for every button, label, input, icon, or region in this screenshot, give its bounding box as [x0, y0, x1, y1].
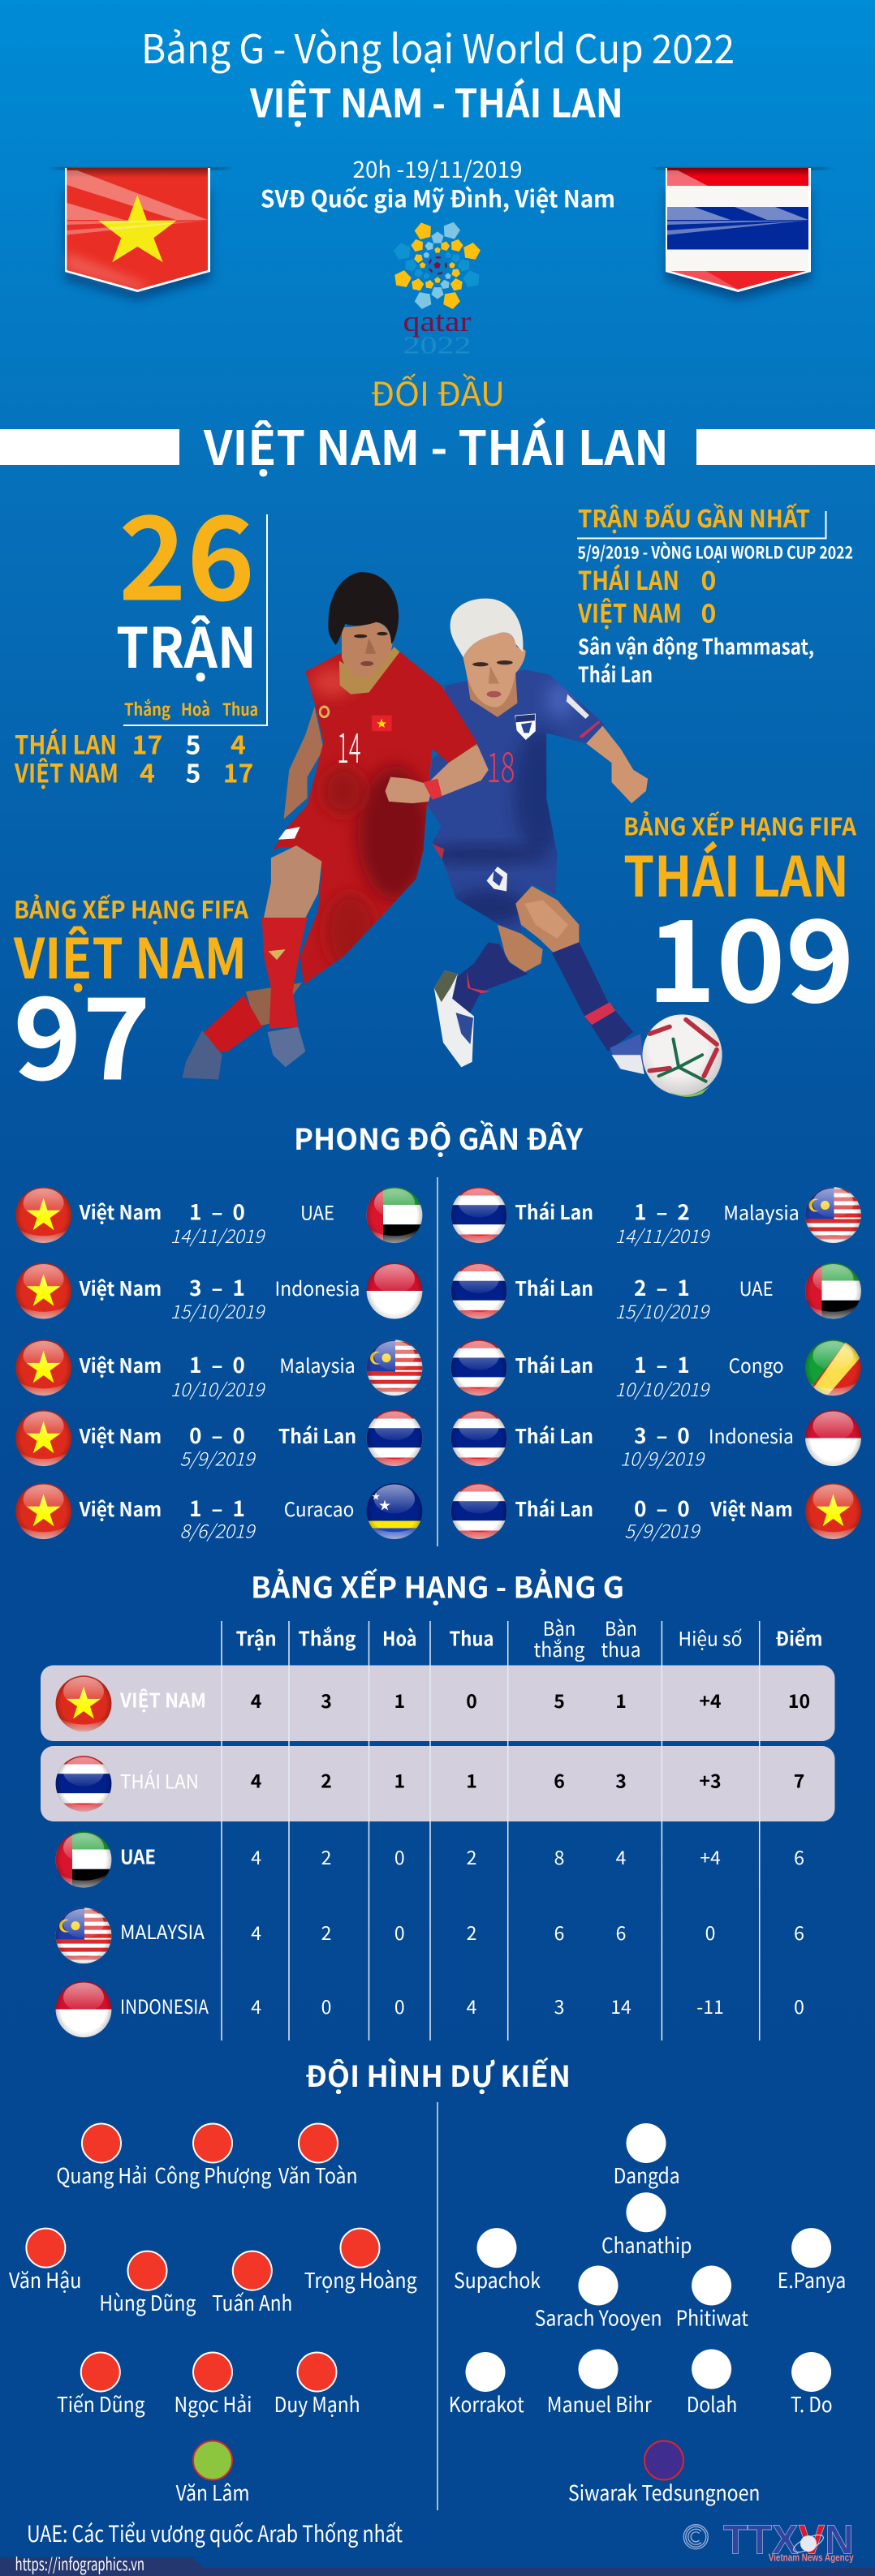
FIFA ranking: Thailand: [623, 806, 857, 1035]
match: TH - Congo: [450, 1340, 865, 1402]
row: Thái Lan: THÁI LAN: [15, 725, 117, 763]
title: match: VIỆT NAM - THÁI LAN: [249, 71, 623, 128]
goalkeeper marker: [193, 2441, 232, 2479]
row: Thái Lan: +3: [699, 1766, 722, 1794]
score: Thái Lan: 0: [701, 561, 716, 598]
row: Indonesia: [55, 1981, 804, 2038]
front leg: [515, 886, 579, 953]
back leg: [246, 983, 302, 1026]
row: Việt Nam: VIỆT NAM: [14, 753, 119, 790]
match: TH - UAE: 15/10/2019: [615, 1297, 711, 1324]
match: VN - Indonesia: Việt Nam: [79, 1273, 162, 1301]
player names: E.Panya: [778, 2264, 846, 2294]
player names: Dangda: [614, 2160, 680, 2190]
row: Malaysia: 6: [554, 1918, 564, 1946]
match: VN - Indonesia: 3 – 1: [189, 1272, 245, 1302]
score: Việt Nam: 0: [701, 594, 716, 631]
row: UAE: 2: [467, 1843, 476, 1870]
row: Thái Lan: 4: [251, 1766, 261, 1794]
match: TH - Congo: Thái Lan: [515, 1350, 593, 1378]
row: UAE: 4: [616, 1843, 627, 1870]
player names: Công Phượng: [154, 2160, 272, 2190]
row: Việt Nam: +4: [699, 1686, 722, 1714]
FIFA ranking: Thailand: 109: [647, 871, 855, 1035]
logo: TTXVN: TTXVN: [723, 2516, 854, 2562]
match: VN - Thailand: [15, 1410, 423, 1472]
torso and shorts: [273, 650, 477, 984]
table header: thua: [601, 1634, 641, 1662]
FIFA ranking: Vietnam: BẢNG XẾP HẠNG FIFA: [14, 890, 249, 926]
FIFA ranking: Vietnam: 97: [13, 949, 151, 1113]
panel: recent form: [15, 1177, 866, 1546]
flag ribbon: Vietnam: [49, 167, 233, 300]
forearm: [386, 746, 489, 803]
heading: recent form: PHONG ĐỘ GẦN ĐÂY: [294, 1116, 584, 1159]
player: Thailand: [412, 599, 648, 1074]
match: VN - Malaysia: Việt Nam: [79, 1350, 162, 1378]
arm: [586, 726, 648, 803]
column headers: Thắng: [124, 697, 170, 721]
row: Thái Lan: 7: [794, 1766, 804, 1794]
row: Việt Nam: [55, 1675, 810, 1732]
match: TH - Indonesia: 3 – 0: [634, 1420, 690, 1450]
player names: Hùng Dũng: [99, 2287, 196, 2317]
row: Thái Lan: THÁI LAN: [120, 1765, 199, 1795]
row: Malaysia: 2: [467, 1918, 476, 1946]
match: VN - Curacao: 1 – 1: [189, 1493, 245, 1523]
footer band: [0, 2552, 875, 2576]
table header: Hoà: [382, 1623, 417, 1652]
title: group: Bảng G - Vòng loại World Cup 2022: [141, 18, 735, 75]
logo wordmark: qatar: qatar: [403, 305, 472, 338]
row: Việt Nam: 3: [321, 1686, 332, 1714]
number of matches: 26: [119, 466, 255, 634]
column headers: Thua: [222, 697, 258, 721]
row: Indonesia: 0: [321, 1992, 331, 2019]
match: TH - Congo: 10/10/2019: [615, 1374, 711, 1402]
row: Malaysia: 2: [321, 1918, 331, 1946]
table header: Bàn: [605, 1613, 637, 1641]
table: group standings: [41, 1613, 834, 2041]
footnote: UAE: Các Tiểu vương quốc Arab Thống nhất: [27, 2517, 403, 2549]
row: Việt Nam: 1: [615, 1686, 627, 1714]
match: VN - Thailand: Việt Nam: [79, 1421, 162, 1449]
match: VN - UAE: [15, 1186, 423, 1249]
player names: Tuấn Anh: [212, 2287, 292, 2317]
match venue: SVĐ Quốc gia Mỹ Đình, Việt Nam: [261, 180, 615, 214]
match: TH - UAE: Thái Lan: [515, 1273, 593, 1301]
row: Việt Nam: 4: [251, 1686, 261, 1714]
match: VN - UAE: 14/11/2019: [170, 1221, 266, 1249]
banner text: VIỆT NAM - THÁI LAN: [203, 411, 669, 479]
row: Thái Lan: 1: [466, 1766, 477, 1794]
player names: T. Do: [791, 2389, 833, 2419]
match: TH - Malaysia: Thái Lan: [515, 1197, 593, 1225]
match: TH - VN: Thái Lan: [515, 1494, 593, 1522]
heading: Đối đầu: ĐỐI ĐẦU: [370, 368, 505, 415]
row: Indonesia: INDONESIA: [120, 1991, 209, 2019]
row: Thái Lan: 1: [394, 1766, 405, 1794]
row: Việt Nam: 1: [394, 1686, 405, 1714]
row: Indonesia: 14: [610, 1992, 631, 2019]
FIFA ranking: Thailand: THÁI LAN: [623, 832, 849, 913]
player names: Ngọc Hải: [174, 2389, 252, 2419]
row: Việt Nam: 17: [223, 753, 253, 790]
player names: [9, 2160, 417, 2507]
label: matches: TRẬN: [116, 604, 256, 684]
table header: Điểm: [776, 1623, 823, 1652]
row: Indonesia: 3: [554, 1992, 564, 2019]
row: Indonesia: 4: [467, 1992, 477, 2019]
row: Malaysia: 0: [705, 1918, 715, 1946]
row: UAE: 6: [794, 1843, 804, 1870]
FIFA ranking: Thailand: BẢNG XẾP HẠNG FIFA: [623, 806, 857, 842]
match: VN - Malaysia: 10/10/2019: [170, 1374, 266, 1402]
stat box: head-to-head: [14, 466, 267, 790]
row: UAE: [55, 1831, 804, 1889]
row: UAE: +4: [700, 1843, 721, 1870]
venue: Thái Lan: [578, 659, 653, 689]
table header: Thắng: [299, 1623, 356, 1652]
row: Indonesia: 0: [794, 1992, 804, 2019]
player names: Văn Hậu: [9, 2264, 81, 2294]
player names: [449, 2160, 846, 2507]
match: VN - Indonesia: [15, 1262, 423, 1324]
player names: Văn Lâm: [176, 2477, 250, 2507]
header: [141, 18, 735, 214]
player: Thailand: 18: [487, 734, 515, 794]
player: Vietnam: 14: [337, 715, 361, 775]
score: Thái Lan: THÁI LAN: [578, 561, 679, 598]
match: TH - Malaysia: 14/11/2019: [615, 1221, 711, 1249]
match: TH - Indonesia: Indonesia: [709, 1421, 794, 1449]
match: TH - VN: Việt Nam: [709, 1494, 793, 1522]
panel: latest match: [577, 499, 853, 689]
match: VN - Indonesia: 15/10/2019: [170, 1297, 266, 1324]
back arm: [284, 707, 324, 819]
box frame: [123, 514, 267, 725]
row: Việt Nam: 5: [554, 1686, 565, 1714]
match: VN - Curacao: 8/6/2019: [180, 1516, 256, 1543]
player names: Dolah: [687, 2389, 737, 2419]
goalkeeper marker: [644, 2441, 683, 2479]
back leg and sock: [498, 925, 543, 972]
match: VN - Malaysia: [15, 1340, 423, 1402]
player names: Sarach Yooyen: [535, 2303, 662, 2333]
row: Malaysia: [55, 1907, 804, 1964]
venue: Sân vận động Thammasat,: [578, 631, 814, 660]
panel frame: [577, 511, 826, 539]
match: VN - UAE: Việt Nam: [79, 1197, 162, 1225]
logo globe: [791, 2531, 825, 2556]
head: [339, 647, 399, 695]
FIFA ranking: Vietnam: VIỆT NAM: [13, 914, 247, 995]
table header: Trận: [236, 1623, 277, 1652]
torso and shorts: [427, 669, 605, 934]
player names: Chanathip: [601, 2230, 692, 2260]
match: VN - Indonesia: Indonesia: [274, 1273, 360, 1301]
player names: Quang Hải: [56, 2160, 147, 2190]
match: TH - Malaysia: 1 – 2: [634, 1196, 690, 1227]
match: VN - Thailand: 0 – 0: [189, 1420, 245, 1450]
match: TH - VN: [450, 1483, 862, 1543]
players illustration: [183, 572, 722, 1097]
row: Việt Nam: [14, 753, 253, 790]
match: TH - Indonesia: 10/9/2019: [620, 1444, 706, 1472]
neck and head: [467, 673, 517, 717]
player names: Phitiwat: [676, 2303, 748, 2333]
player names: Supachok: [454, 2264, 541, 2294]
row: Thái Lan: 3: [615, 1766, 627, 1794]
match: VN - Thailand: 5/9/2019: [180, 1444, 256, 1472]
row: Indonesia: 0: [394, 1992, 405, 2019]
match: TH - Congo: Congo: [729, 1350, 784, 1378]
row: Thái Lan: 17: [132, 725, 162, 763]
row: Indonesia: -11: [696, 1992, 724, 2019]
match: TH - Malaysia: Malaysia: [723, 1198, 800, 1225]
row: Việt Nam: 5: [186, 753, 200, 790]
panel heading: TRẬN ĐẤU GẦN NHẤT: [578, 499, 810, 535]
row: Malaysia: 6: [794, 1918, 804, 1946]
panel: line-up Vietnam: [9, 2124, 417, 2507]
banner: Việt Nam - Thái Lan: [0, 411, 875, 479]
match: TH - UAE: UAE: [739, 1273, 774, 1301]
row: UAE: UAE: [120, 1842, 156, 1869]
score: Việt Nam: VIỆT NAM: [577, 594, 682, 631]
match: VN - Curacao: Việt Nam: [79, 1494, 162, 1522]
player: Vietnam: [183, 572, 489, 1080]
row: Thái Lan: 6: [554, 1766, 565, 1794]
flag ribbon: Thailand: [649, 167, 834, 300]
logo wordmark: 2022: 2022: [403, 331, 471, 359]
table header: Bàn: [543, 1613, 575, 1641]
match: TH - UAE: [450, 1262, 862, 1324]
match: VN - UAE: UAE: [300, 1198, 334, 1225]
row: UAE: 2: [321, 1843, 331, 1870]
row: Thái Lan: [15, 725, 246, 763]
player names: Siwarak Tedsungnoen: [568, 2477, 760, 2507]
row: Thái Lan: 4: [231, 725, 246, 763]
row: Thái Lan: 5: [186, 725, 200, 763]
match: TH - VN: 5/9/2019: [624, 1516, 701, 1543]
player names: Duy Mạnh: [274, 2389, 360, 2419]
row: UAE: 4: [251, 1843, 261, 1870]
venue: [578, 631, 814, 689]
match: TH - VN: 0 – 0: [634, 1493, 690, 1523]
row: UAE: 8: [554, 1843, 564, 1870]
player names: Văn Toàn: [278, 2160, 358, 2190]
column headers: [124, 697, 258, 721]
footer url: https://infographics.vn: [15, 2552, 144, 2576]
player names: Manuel Bihr: [547, 2389, 653, 2419]
player names: Tiến Dũng: [57, 2389, 145, 2419]
table header: [236, 1613, 823, 1662]
football: [642, 1014, 722, 1097]
match time: 20h -19/11/2019: [352, 153, 523, 185]
row: Việt Nam: 10: [788, 1686, 810, 1714]
column headers: Hoà: [181, 697, 210, 721]
match: VN - Malaysia: 1 – 0: [189, 1349, 245, 1379]
heading: standings: BẢNG XẾP HẠNG - BẢNG G: [251, 1564, 624, 1606]
match: VN - Curacao: [15, 1483, 423, 1543]
row: Indonesia: 4: [251, 1992, 261, 2019]
row: UAE: 0: [394, 1843, 405, 1870]
FIFA ranking: Vietnam: [13, 890, 249, 1113]
match: TH - Indonesia: Thái Lan: [515, 1421, 593, 1449]
match: VN - Curacao: Curacao: [284, 1494, 354, 1522]
row: Việt Nam: VIỆT NAM: [119, 1684, 206, 1714]
table header: Hiệu số: [679, 1623, 742, 1652]
row: Việt Nam: 4: [140, 753, 155, 790]
table header: thắng: [534, 1634, 585, 1662]
match: VN - Thailand: Thái Lan: [278, 1421, 356, 1449]
heading: predicted line-up: ĐỘI HÌNH DỰ KIẾN: [305, 2053, 571, 2096]
match: TH - Congo: 1 – 1: [634, 1349, 690, 1379]
panel: line-up Thailand: [438, 2102, 846, 2510]
front leg: [264, 845, 321, 918]
match: VN - UAE: 1 – 0: [189, 1196, 245, 1227]
row: Malaysia: 6: [616, 1918, 626, 1946]
match: TH - UAE: 2 – 1: [634, 1272, 690, 1302]
row: Thái Lan: [55, 1756, 804, 1813]
row: Việt Nam: 0: [466, 1686, 477, 1714]
row: Malaysia: 0: [394, 1918, 405, 1946]
table header: Thua: [450, 1623, 494, 1652]
match: TH - Malaysia: [450, 1186, 862, 1249]
logo: Qatar 2022: [393, 220, 481, 359]
player names: Trọng Hoàng: [304, 2264, 417, 2294]
match: VN - Malaysia: Malaysia: [279, 1350, 356, 1378]
match: TH - Indonesia: [450, 1410, 862, 1472]
row: Thái Lan: 2: [321, 1766, 332, 1794]
row: Malaysia: MALAYSIA: [120, 1916, 205, 1945]
player names: Korrakot: [449, 2389, 524, 2419]
row: Malaysia: 4: [251, 1918, 261, 1946]
icon: copyright: [683, 2525, 708, 2549]
